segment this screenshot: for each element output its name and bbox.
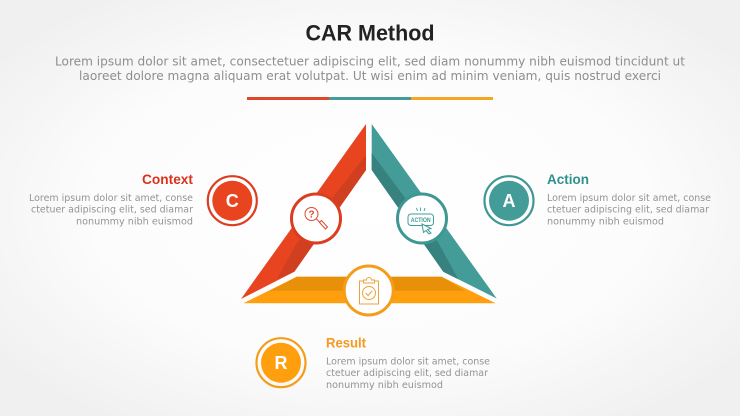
- icon badge: action button with cursor: ACTION: [411, 218, 431, 224]
- block: result: Result: [326, 334, 366, 350]
- triangle segment: action (teal): [372, 124, 497, 298]
- result letter badge: R: [274, 353, 288, 373]
- subtitle text: Lorem ipsum dolor sit amet, consectetuer adipiscing elit, sed diam nonummy nibh euismod tincidunt ut: [55, 54, 685, 68]
- block: action: [484, 171, 711, 228]
- block: context: [29, 171, 257, 228]
- result letter badge: [256, 338, 306, 387]
- block: result: [256, 334, 490, 391]
- block: result: nonummy nibh euismod: [326, 380, 443, 391]
- context letter badge: [208, 176, 257, 225]
- subtitle text: laoreet dolore magna aliquam erat volutpat. Ut wisi enim ad minim veniam, quis nostrud exerci: [79, 69, 661, 83]
- triangle segment: context (red): [241, 124, 366, 299]
- block: context: ctetuer adipiscing elit, sed diamar: [31, 204, 193, 216]
- action letter badge: A: [502, 191, 516, 211]
- icon badge: magnifier with question mark: [292, 194, 340, 243]
- title: CAR Method: [306, 20, 434, 46]
- block: action: Action: [547, 171, 589, 187]
- block: context: nonummy nibh euismod: [76, 216, 193, 228]
- icon badge: action button with cursor: [398, 194, 446, 243]
- icon badge: magnifier with question mark: ?: [308, 210, 315, 220]
- icon badge: clipboard with check: [344, 266, 393, 315]
- block: context: Context: [142, 171, 193, 187]
- subtitle text: [55, 54, 685, 83]
- block: result: Lorem ipsum dolor sit amet, conse: [326, 356, 490, 368]
- block: action: Lorem ipsum dolor sit amet, conse: [547, 193, 711, 204]
- action letter badge: [484, 176, 534, 225]
- block: action: nonummy nibh euismod: [547, 216, 664, 228]
- block: result: ctetuer adipiscing elit, sed diamar: [326, 368, 488, 379]
- tri-colour divider: [247, 97, 493, 100]
- triangle segment: result (orange): [243, 277, 496, 303]
- block: context: Lorem ipsum dolor sit amet, conse: [29, 193, 193, 204]
- context letter badge: C: [226, 191, 239, 211]
- block: action: ctetuer adipiscing elit, sed diamar: [547, 204, 709, 216]
